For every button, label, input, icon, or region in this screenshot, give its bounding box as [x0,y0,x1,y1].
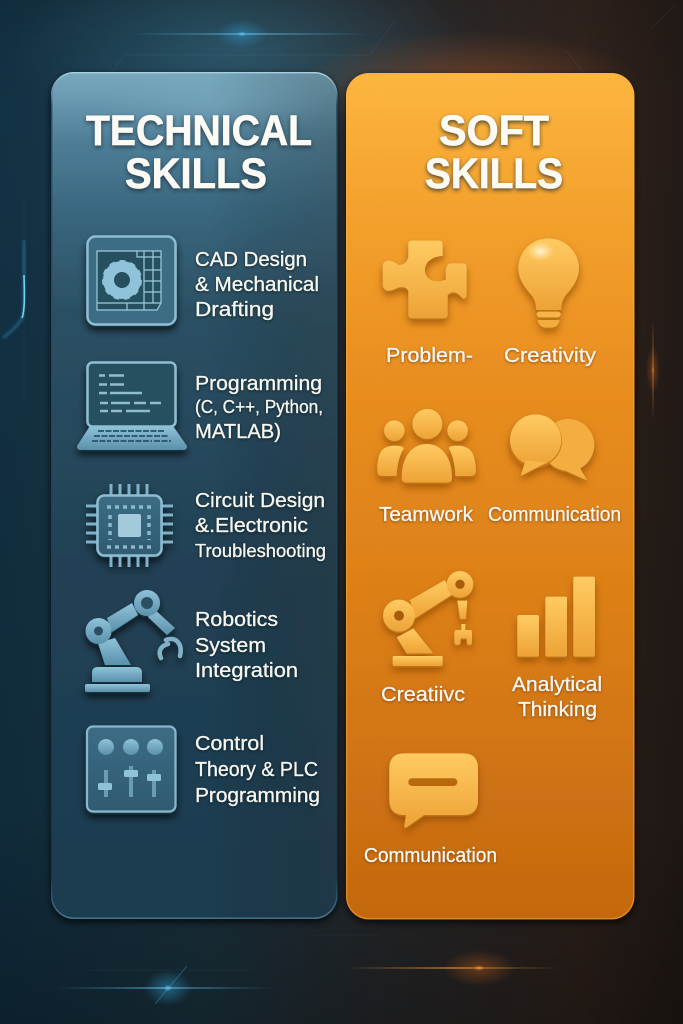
icon: speech bubbles [509,414,594,481]
heading: technical skills: SKILLS [125,150,267,198]
heading: technical skills: TECHNICAL [86,107,312,155]
label: control theory: Programming [195,785,320,807]
heading: technical skills [86,107,312,198]
label: control theory: Theory & PLC [195,759,318,781]
label: creativity variant: Creatiivc [381,684,465,706]
label: programming: (C, C++, Python, [195,397,323,417]
icon: robot arm [85,590,181,692]
icon: microchip [86,484,173,567]
label: creativity: Creativity [504,345,596,367]
label: CAD design [195,249,319,321]
panel: technical skills [51,72,338,919]
label: analytical thinking: Analytical [512,674,602,696]
label: programming: MATLAB) [195,421,281,443]
label: robotics: System [195,635,266,657]
label: CAD design: & Mechanical [195,274,319,296]
label: CAD design: Drafting [195,299,274,321]
label: control theory [195,733,320,807]
label: circuit design: &.Electronic [195,515,308,537]
panel: soft skills [346,73,634,920]
heading: soft skills: SOFT [439,107,549,155]
icon: control panel [87,726,176,812]
glow: bottom orange flare [345,950,560,986]
icon: bar chart [517,577,595,657]
glow: bottom blue flare [55,966,275,1006]
label: CAD design: CAD Design [195,249,307,271]
icon: light bulb [518,238,579,328]
label: programming: Programming [195,373,322,395]
panel background: technical [51,72,338,919]
label: robotics [195,609,298,682]
label: control theory: Control [195,733,264,755]
icon: team [377,409,476,483]
heading: soft skills: SKILLS [425,150,563,198]
label: problem: Problem- [386,345,473,367]
label: circuit design [195,490,326,561]
label: analytical thinking [512,674,602,721]
glow: left blue streak [3,240,24,338]
heading: soft skills [425,107,563,198]
icon: chat bubble [389,753,478,828]
label: analytical thinking: Thinking [518,699,597,721]
label: programming [195,373,323,443]
icon: puzzle piece [383,241,467,318]
icon: orange robot arm [383,571,473,666]
label: communication: Communication [488,504,621,526]
label: robotics: Integration [195,660,298,682]
label: communication 2: Communication [364,845,497,867]
glow: right orange streak [646,320,660,420]
icon: CAD drawing with gear [88,236,176,324]
label: teamwork: Teamwork [379,504,474,526]
label: robotics: Robotics [195,609,278,631]
glow: top blue flare [130,20,370,48]
icon: laptop [77,362,187,450]
label: circuit design: Troubleshooting [195,541,326,561]
panel background: soft [346,73,634,920]
label: circuit design: Circuit Design [195,490,325,512]
